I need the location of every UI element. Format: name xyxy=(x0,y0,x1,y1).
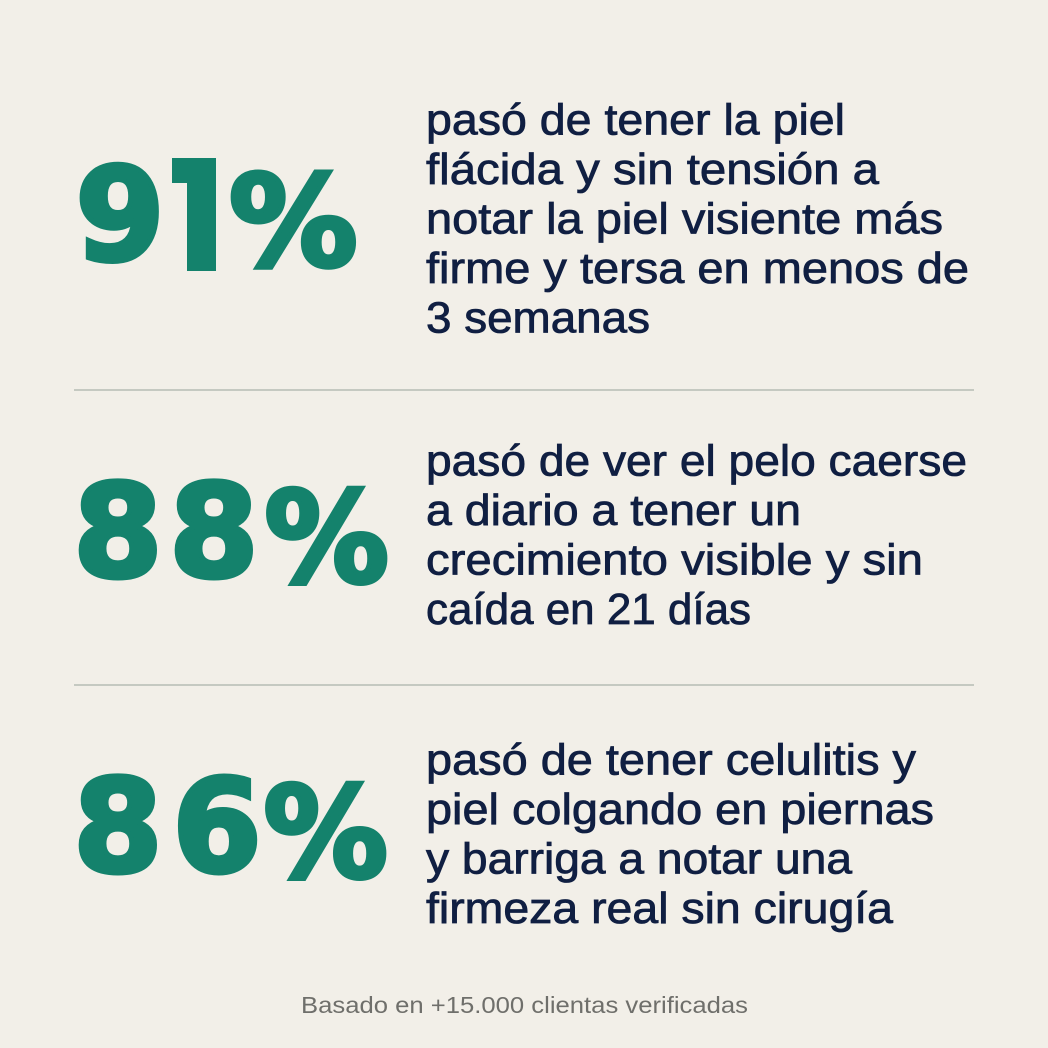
statistic: 88%: 8 xyxy=(73,458,162,607)
text: cellulite result: pasó de tener celulitis y xyxy=(426,736,916,784)
text: cellulite result: y barriga a notar una xyxy=(426,834,853,884)
text: hair growth result: a diario a tener un xyxy=(426,486,801,535)
statistic: 88% xyxy=(73,458,389,612)
text: skin firmness result: 3 semanas xyxy=(426,294,650,342)
statistic: 91%: 9 xyxy=(76,142,165,290)
statistic: 91%: 1 xyxy=(155,142,244,290)
statistic: 86%: % xyxy=(264,760,388,907)
footnote: Basado en +15.000 clientas verificadas xyxy=(301,992,748,1018)
statistic: 91% xyxy=(80,158,356,271)
statistic: 86%: 6 xyxy=(172,753,262,902)
text: skin firmness result: pasó de tener la piel xyxy=(426,96,845,144)
statistic: 91%: % xyxy=(229,150,358,296)
text: cellulite result xyxy=(426,736,934,933)
text: cellulite result: firmeza real sin cirugía xyxy=(426,884,894,933)
text: hair growth result: caída en 21 días xyxy=(426,585,751,634)
text: hair growth result: pasó de ver el pelo caerse xyxy=(426,436,967,486)
text: hair growth result: crecimiento visible y sin xyxy=(426,536,923,584)
text: hair growth result xyxy=(426,436,967,634)
statistic: 88%: 8 xyxy=(169,458,258,607)
text: skin firmness result xyxy=(426,96,969,342)
text: skin firmness result: flácida y sin tensión a xyxy=(426,145,880,194)
text: cellulite result: piel colgando en piernas xyxy=(426,785,934,834)
statistic: 86%: 8 xyxy=(73,753,162,902)
statistic: 86% xyxy=(73,753,388,907)
text: skin firmness result: notar la piel visiente más xyxy=(426,194,943,244)
statistic: 88%: % xyxy=(264,465,389,612)
text: skin firmness result: firme y tersa en menos de xyxy=(426,244,969,293)
